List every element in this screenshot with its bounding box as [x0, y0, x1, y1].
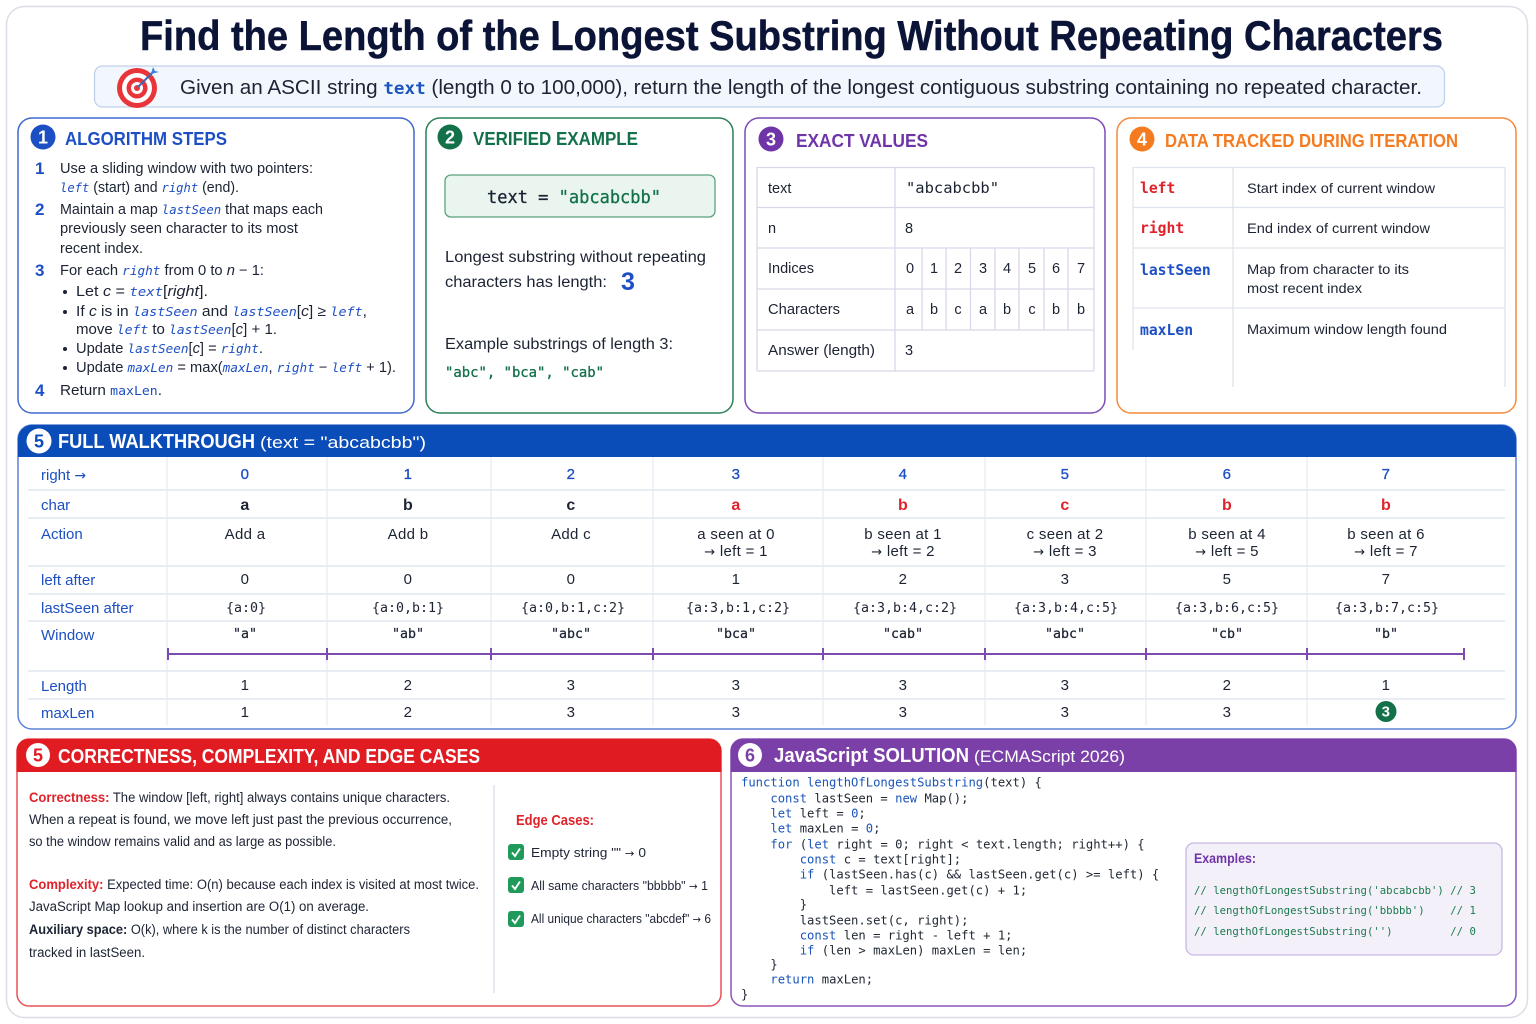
panel: algorithm steps [18, 118, 414, 413]
left after row: 1 [732, 571, 740, 588]
input string box: text = "abcabcbb" [487, 188, 661, 208]
maxLen row: 3 [1061, 704, 1069, 721]
result text [445, 249, 706, 296]
code block: const c = text[right]; [741, 852, 961, 866]
problem statement banner [94, 66, 1444, 108]
values table: c [954, 302, 962, 318]
tracked variables table: lastSeen [1140, 262, 1211, 279]
badge 1 [30, 124, 56, 150]
values table: 8 [905, 221, 913, 237]
left after row: 0 [567, 571, 575, 588]
length row [241, 677, 1390, 694]
action row: Add c [551, 526, 591, 543]
result text: 3 [621, 268, 635, 296]
title: Find the Length of the Longest Substring Without Repeating Characters [140, 12, 1443, 59]
char row: a [731, 497, 741, 514]
code block [741, 776, 1159, 1002]
examples box [1186, 843, 1502, 955]
tracked variables table: most recent index [1247, 280, 1362, 296]
window row: "a" [233, 627, 257, 642]
length row: 2 [404, 677, 412, 694]
values table: 4 [1003, 261, 1011, 277]
step list: 4 [35, 381, 45, 400]
complexity text: Auxiliary space: O(k), where k is the number of distinct characters [29, 922, 410, 937]
badge 3 [758, 126, 784, 152]
code block: return maxLen; [741, 972, 873, 986]
values table: b [930, 302, 938, 318]
result text: characters has length: [445, 274, 607, 291]
panel: javascript solution [730, 739, 1516, 1006]
code block: if (lastSeen.has(c) && lastSeen.get(c) >= left) { [741, 868, 1159, 882]
correctness header: CORRECTNESS, COMPLEXITY, AND EDGE CASES [58, 746, 480, 768]
tracked variables table [1133, 167, 1505, 387]
complexity text: JavaScript Map lookup and insertion are O(1) on average. [29, 899, 369, 914]
step list: move left to lastSeen[c] + 1. [76, 322, 277, 338]
right index row: 0 [241, 466, 249, 483]
right index row: 7 [1382, 466, 1390, 483]
action row: a seen at 0 [697, 526, 775, 543]
window row: "cb" [1211, 627, 1243, 642]
correctness text: When a repeat is found, we move left just past the previous occurrence, [29, 812, 452, 827]
tracked variables table: Map from character to its [1247, 261, 1409, 277]
action row: → left = 1 [704, 543, 768, 560]
code block: } [741, 898, 807, 912]
char row: c [566, 497, 576, 514]
icon: target [117, 67, 159, 108]
examples box: // lengthOfLongestSubstring('abcabcbb') // 3 [1194, 884, 1476, 897]
walkthrough header: 5 [34, 432, 44, 452]
values table: b [1003, 302, 1011, 318]
values table: b [1077, 302, 1085, 318]
step list [35, 159, 396, 400]
code block: const lastSeen = new Map(); [741, 792, 968, 806]
step list: 3 [35, 261, 44, 280]
heading: algorithm steps: ALGORITHM STEPS [65, 129, 227, 149]
tracked variables table: right [1140, 220, 1184, 237]
action row [225, 526, 1425, 560]
window row: "bca" [716, 627, 756, 642]
step list: Update maxLen = max(maxLen, right − left + 1). [76, 360, 396, 376]
code block: } [741, 988, 748, 1002]
char row: a [240, 497, 250, 514]
lastSeen after row: {a:3,b:4,c:2} [853, 601, 957, 616]
code block: for (let right = 0; right < text.length; right++) { [741, 838, 1145, 852]
values table: Characters [768, 302, 840, 318]
tracked variables table: Maximum window length found [1247, 321, 1447, 337]
action row: Add b [388, 526, 428, 543]
edge cases: Edge Cases: [516, 812, 594, 829]
row labels: left after [41, 572, 95, 589]
window row: "cab" [883, 627, 923, 642]
action row: → left = 7 [1354, 543, 1418, 560]
code block: } [741, 958, 778, 972]
code block: if (len > maxLen) maxLen = len; [741, 944, 1027, 958]
right index row [241, 466, 1390, 483]
correctness header: 5 [33, 746, 43, 766]
action row: → left = 3 [1033, 543, 1097, 560]
step list: For each right from 0 to n − 1: [60, 263, 264, 279]
maxLen row: 3 [1223, 704, 1231, 721]
lastSeen after row: {a:0,b:1,c:2} [521, 601, 625, 616]
badge 2 [438, 124, 462, 150]
correctness text: so the window remains valid and as large as possible. [29, 834, 336, 849]
code block: lastSeen.set(c, right); [741, 914, 968, 928]
badge 2: 2 [445, 128, 455, 148]
panel: exact values [745, 118, 1105, 413]
step list: Let c = text[right]. [76, 284, 208, 300]
heading: exact values: EXACT VALUES [796, 131, 928, 151]
code block: function lengthOfLongestSubstring(text) { [741, 776, 1042, 790]
step list: previously seen character to its most [60, 221, 298, 237]
examples box: // lengthOfLongestSubstring('') // 0 [1194, 925, 1476, 938]
values table: text [768, 181, 791, 197]
maxLen row: 3 [899, 704, 907, 721]
values table: 3 [979, 261, 987, 277]
length row: 3 [1061, 677, 1069, 694]
left after row: 7 [1382, 571, 1390, 588]
action row: b seen at 1 [864, 526, 942, 543]
badge 1: 1 [38, 128, 48, 148]
tracked variables table: End index of current window [1247, 220, 1431, 236]
left after row: 5 [1223, 571, 1231, 588]
solution header: 6 [745, 746, 755, 766]
maxLen row [241, 701, 1396, 722]
row labels: Length [41, 678, 87, 695]
solution header: (ECMAScript 2026) [974, 747, 1125, 766]
length row: 3 [899, 677, 907, 694]
badge 4 [1130, 126, 1154, 152]
char row: b [403, 497, 413, 514]
tracked variables table: Start index of current window [1247, 180, 1436, 196]
example substrings: Example substrings of length 3: [445, 336, 673, 353]
values table: "abcabcbb" [906, 179, 999, 197]
values table: a [906, 302, 915, 318]
walkthrough header: (text = "abcabcbb") [260, 433, 426, 452]
badge 3: 3 [766, 130, 776, 150]
heading: data tracked: DATA TRACKED DURING ITERATION [1165, 131, 1458, 151]
action row: b seen at 4 [1188, 526, 1266, 543]
window timeline [168, 648, 1464, 660]
row labels: maxLen [41, 705, 94, 722]
code block: let maxLen = 0; [741, 822, 880, 836]
char row: b [1381, 497, 1391, 514]
left after row: 2 [899, 571, 907, 588]
right index row: 3 [732, 466, 740, 483]
values table: 7 [1077, 261, 1085, 277]
row labels: right → [41, 467, 86, 484]
correctness text: Correctness: The window [left, right] always contains unique characters. [29, 790, 450, 805]
lastSeen after row: {a:3,b:6,c:5} [1175, 601, 1279, 616]
lastSeen after row: {a:0} [226, 601, 266, 616]
window row [233, 627, 1398, 642]
action row: Add a [225, 526, 266, 543]
examples box: Examples: [1194, 850, 1256, 866]
maxLen row: 1 [241, 704, 249, 721]
action row: c seen at 2 [1027, 526, 1103, 543]
panel: verified example [426, 118, 733, 413]
values table: c [1028, 302, 1036, 318]
char row: b [1222, 497, 1232, 514]
tracked variables table: left [1140, 180, 1175, 197]
example substrings [445, 336, 673, 381]
length row: 1 [1382, 677, 1390, 694]
walkthrough grid [28, 457, 1505, 725]
action row: → left = 2 [871, 543, 935, 560]
values table: Answer (length) [768, 343, 875, 359]
length row: 2 [1223, 677, 1231, 694]
panel: data tracked during iteration [1117, 118, 1516, 413]
right index row: 5 [1061, 466, 1069, 483]
check 3 [508, 911, 524, 927]
edge cases: All unique characters "abcdef" → 6 [531, 911, 711, 926]
edge cases [508, 812, 711, 927]
step list: 1 [35, 159, 44, 178]
row labels [41, 467, 134, 722]
window row: "ab" [392, 627, 424, 642]
char row: c [1060, 497, 1070, 514]
step list: Maintain a map lastSeen that maps each [60, 202, 323, 218]
lastSeen after row: {a:3,b:1,c:2} [686, 601, 790, 616]
lastSeen after row: {a:0,b:1} [372, 601, 444, 616]
action row: b seen at 6 [1347, 526, 1425, 543]
step list: Update lastSeen[c] = right. [76, 341, 263, 357]
panel: full walkthrough [18, 425, 1516, 729]
row labels: Action [41, 526, 83, 543]
result text: Longest substring without repeating [445, 249, 706, 266]
maxLen row: 3 [732, 704, 740, 721]
lastSeen after row: {a:3,b:4,c:5} [1014, 601, 1118, 616]
maxLen row: 3 [1382, 704, 1390, 720]
lastSeen after row [226, 601, 1439, 616]
tracked variables table: maxLen [1140, 322, 1193, 339]
values table: 1 [930, 261, 938, 277]
solution header: JavaScript SOLUTION [774, 745, 969, 767]
lastSeen after row: {a:3,b:7,c:5} [1335, 601, 1439, 616]
complexity text: tracked in lastSeen. [29, 945, 145, 960]
check 1 [508, 844, 524, 860]
left after row [241, 571, 1390, 588]
complexity text: Complexity: Expected time: O(n) because each index is visited at most twice. [29, 877, 479, 892]
step list: 2 [35, 200, 44, 219]
heading: verified example: VERIFIED EXAMPLE [473, 129, 638, 149]
complexity text [29, 877, 479, 960]
values table: 2 [954, 261, 962, 277]
walkthrough header: FULL WALKTHROUGH [58, 431, 255, 453]
step list: left (start) and right (end). [60, 180, 239, 196]
values table [757, 167, 1094, 371]
step list: Return maxLen. [60, 383, 162, 399]
walkthrough header [18, 425, 1516, 457]
values table: Indices [768, 261, 814, 277]
left after row: 0 [404, 571, 412, 588]
char row [240, 497, 1391, 514]
step list: If c is in lastSeen and lastSeen [c] ≥ left, [76, 304, 367, 320]
row labels: Window [41, 627, 95, 644]
badge 4: 4 [1137, 130, 1147, 150]
correctness header [16, 739, 722, 772]
right index row: 4 [899, 466, 907, 483]
length row: 3 [732, 677, 740, 694]
input string box [445, 175, 715, 217]
right index row: 2 [567, 466, 575, 483]
maxLen row: 2 [404, 704, 412, 721]
code block: left = lastSeen.get(c) + 1; [741, 884, 1027, 898]
code block: let left = 0; [741, 806, 866, 820]
window row: "abc" [551, 627, 591, 642]
window row: "abc" [1045, 627, 1085, 642]
step list: Use a sliding window with two pointers: [60, 161, 313, 177]
code block: const len = right - left + 1; [741, 928, 1012, 942]
char row: b [898, 497, 908, 514]
window row: "b" [1374, 627, 1398, 642]
length row: 3 [567, 677, 575, 694]
example substrings: "abc", "bca", "cab" [445, 365, 604, 381]
panel: correctness, complexity, and edge cases [16, 739, 722, 1006]
values table: a [979, 302, 988, 318]
step list: recent index. [60, 241, 143, 257]
problem text: Given an ASCII string text (length 0 to 100,000), return the length of the longest contiguous substring containing no repeated character. [180, 77, 1422, 99]
action row: → left = 5 [1195, 543, 1259, 560]
values table: n [768, 221, 776, 237]
right index row: 1 [404, 466, 412, 483]
right index row: 6 [1223, 466, 1231, 483]
values table: 3 [905, 343, 913, 359]
edge cases: All same characters "bbbbb" → 1 [531, 878, 708, 893]
row labels: lastSeen after [41, 600, 134, 617]
check 2 [508, 877, 524, 893]
length row: 1 [241, 677, 249, 694]
values table: b [1052, 302, 1060, 318]
left after row: 0 [241, 571, 249, 588]
solution header [730, 739, 1516, 772]
values table: 5 [1028, 261, 1036, 277]
values table: 6 [1052, 261, 1060, 277]
correctness text [29, 790, 452, 849]
row labels: char [41, 497, 70, 514]
values table: 0 [906, 261, 914, 277]
examples box: // lengthOfLongestSubstring('bbbbb') // 1 [1194, 904, 1476, 917]
edge cases: Empty string "" → 0 [531, 845, 646, 860]
left after row: 3 [1061, 571, 1069, 588]
maxLen row: 3 [567, 704, 575, 721]
